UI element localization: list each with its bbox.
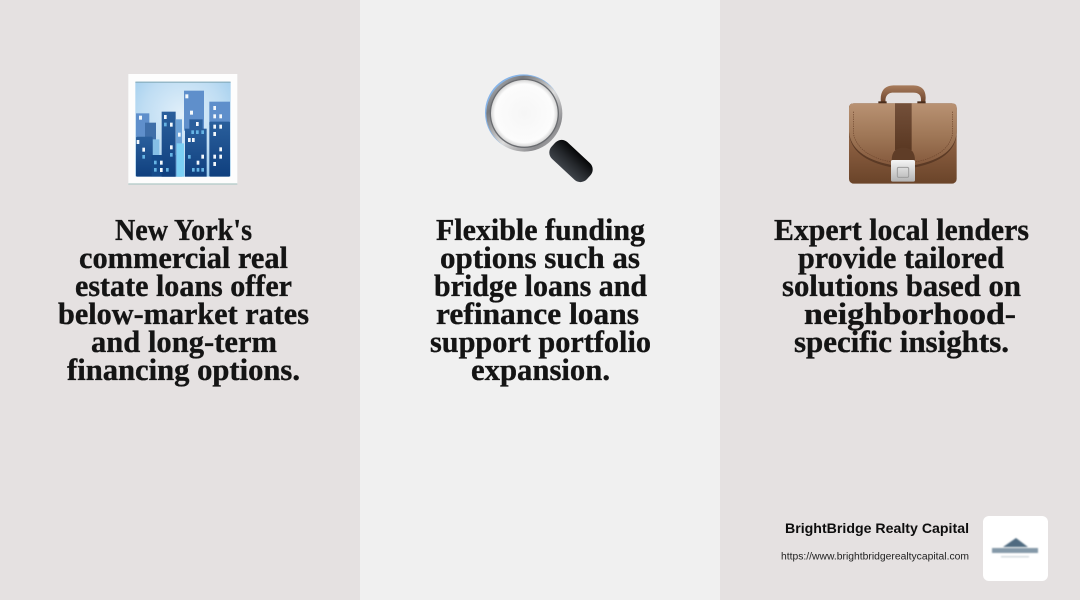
heading: expert local lenders: Expert local lenders <box>774 212 1029 247</box>
panel: below-market rates <box>0 0 360 600</box>
logo tile <box>983 516 1048 581</box>
heading: flexible funding: expansion. <box>471 352 610 387</box>
brand footer <box>781 516 1048 581</box>
heading: below-market rates: financing options. <box>67 352 300 387</box>
heading: flexible funding: bridge loans and <box>434 268 647 303</box>
heading: below-market rates: New York's <box>115 212 252 247</box>
icon: magnifying glass <box>485 74 596 186</box>
icon: cityscape <box>128 74 237 185</box>
heading: below-market rates: estate loans offer <box>75 268 292 303</box>
panel: expert local lenders <box>720 0 1080 600</box>
heading: expert local lenders: specific insights. <box>794 324 1009 359</box>
heading: expert local lenders: provide tailored <box>798 240 1004 275</box>
icon: briefcase <box>849 85 957 184</box>
heading: expert local lenders: neighborhood- <box>804 296 1016 331</box>
heading: below-market rates <box>58 212 309 387</box>
website url: https://www.brightbridgerealtycapital.com <box>781 552 969 562</box>
heading: below-market rates: below-market rates <box>58 296 309 331</box>
heading: below-market rates: commercial real <box>79 240 288 275</box>
brand name: BrightBridge Realty Capital <box>785 520 969 536</box>
heading: expert local lenders: solutions based on <box>782 268 1021 303</box>
heading: flexible funding <box>430 212 651 387</box>
panel: flexible funding <box>360 0 720 600</box>
heading: flexible funding: Flexible funding <box>436 212 645 247</box>
heading: below-market rates: and long-term <box>91 324 277 359</box>
heading: flexible funding: refinance loans <box>436 296 639 331</box>
heading: expert local lenders <box>774 212 1029 359</box>
heading: flexible funding: options such as <box>440 240 640 275</box>
heading: flexible funding: support portfolio <box>430 324 651 359</box>
